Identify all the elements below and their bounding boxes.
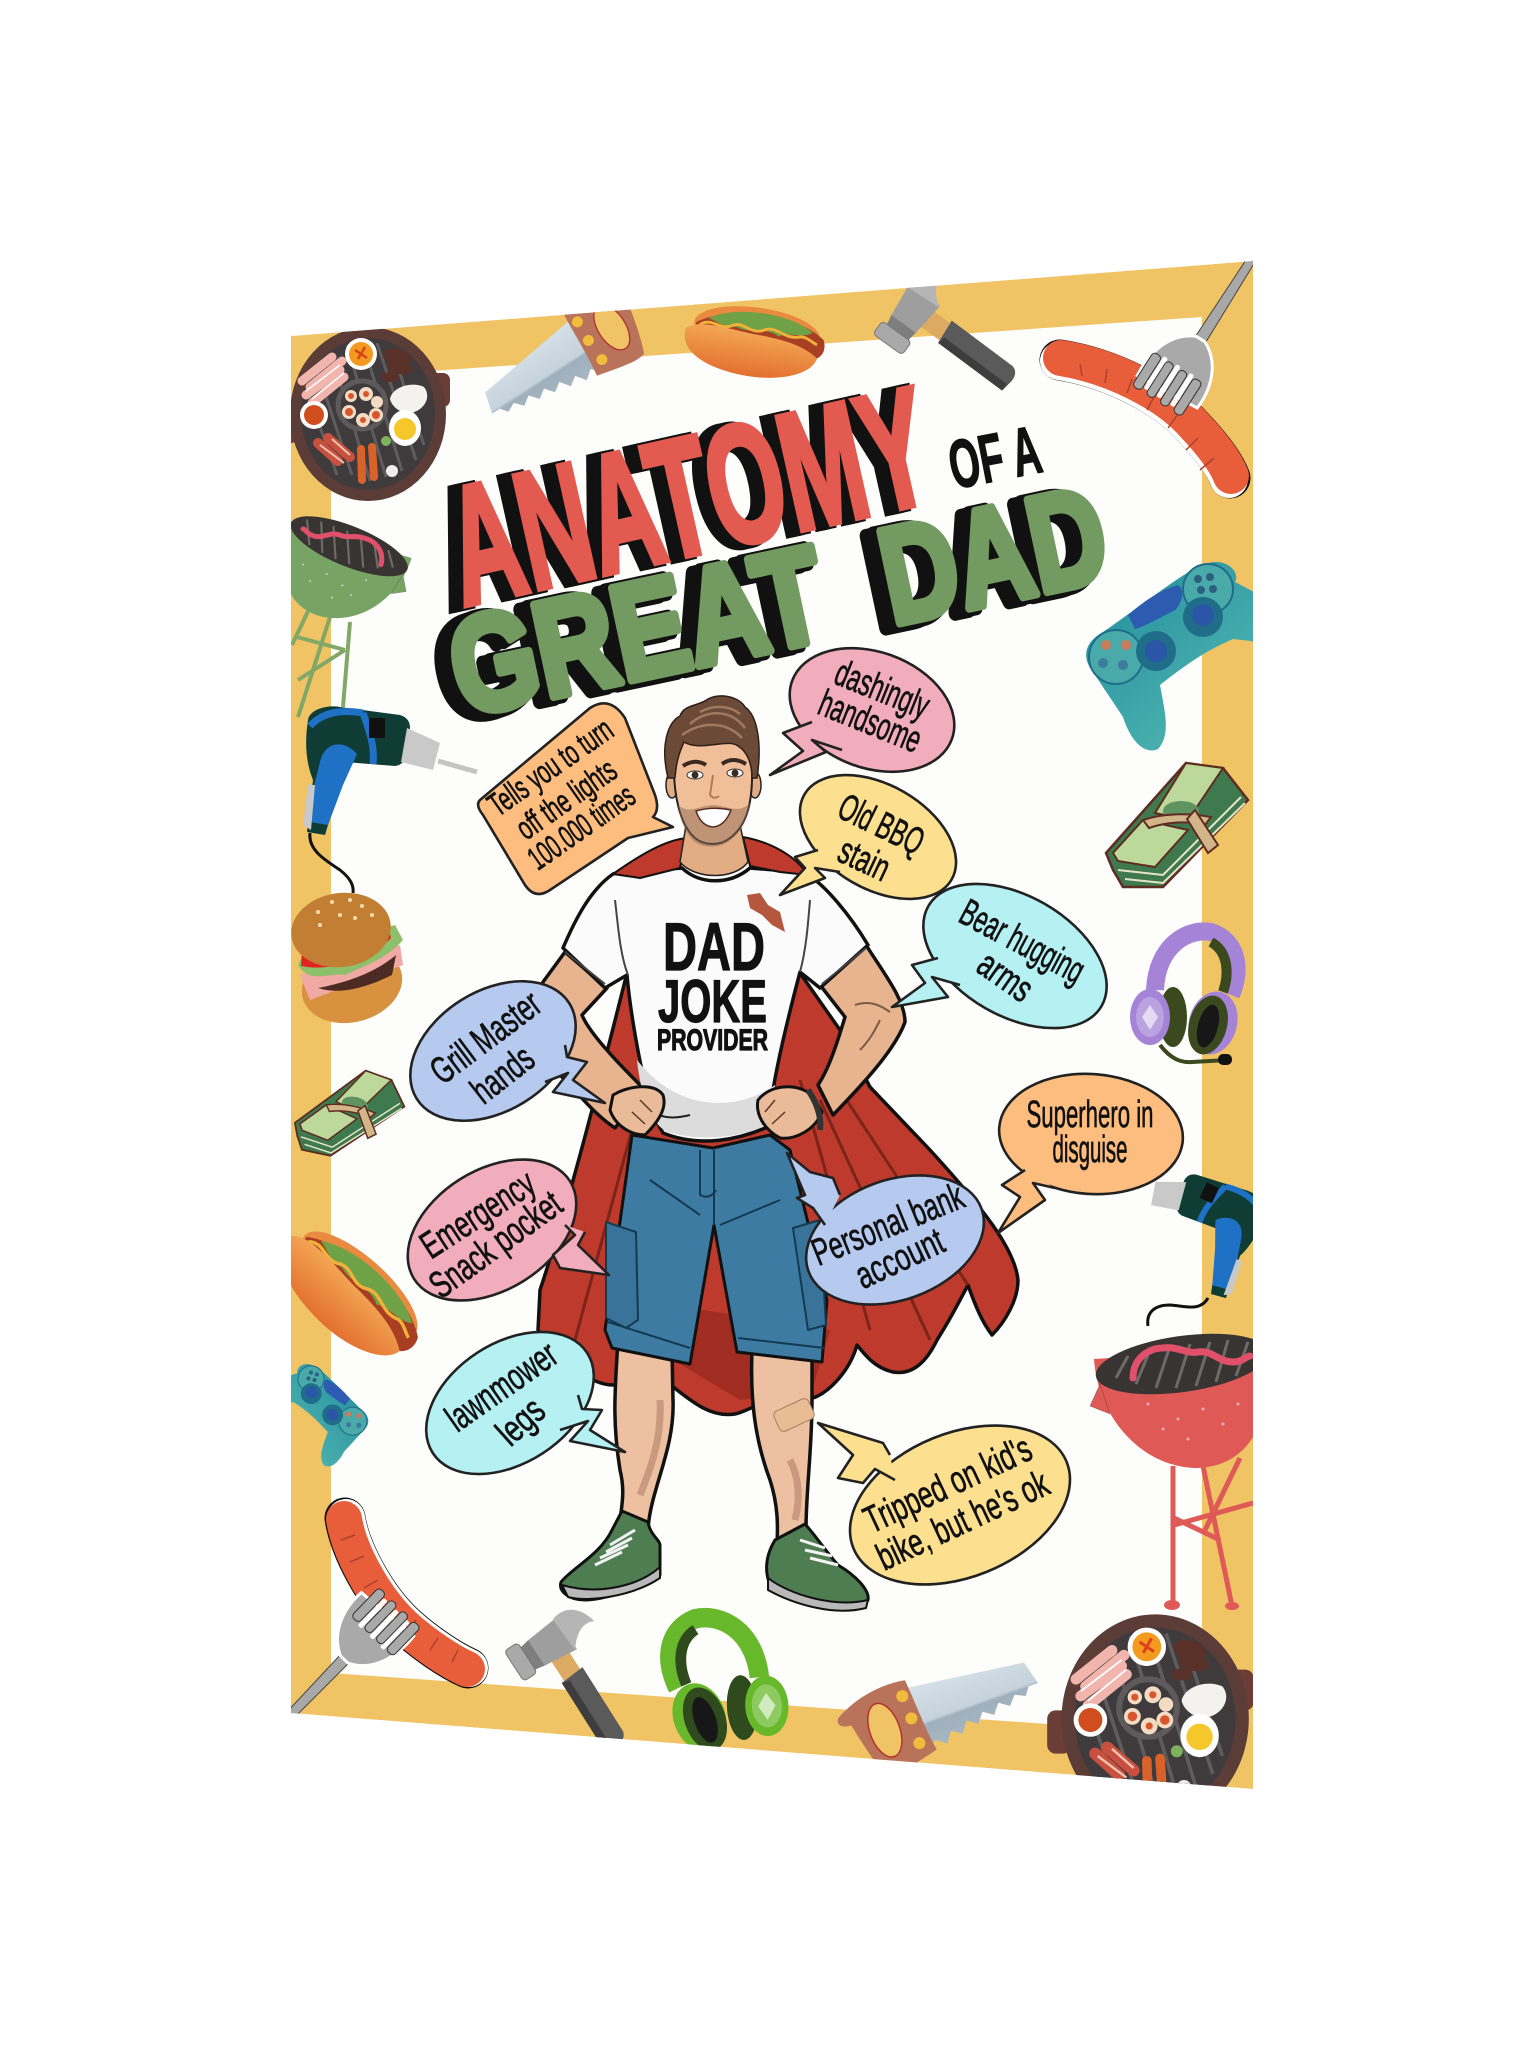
bubble: tripped on kid's bike: bike, but he's ok [870,1463,1056,1579]
bubble: superhero in disguise: Superhero in [1026,1094,1154,1136]
bubble: lawnmower legs: lawnmower [438,1334,566,1440]
head [665,696,761,847]
shirt text: dad joke provider: PROVIDER [657,1024,768,1057]
bubble: grill master hands: Grill Master [423,983,550,1093]
bubble: lawnmower legs [400,1303,625,1503]
bubble: dashingly handsome [770,626,972,794]
bubble: emergency snack pocket: Snack pocket [422,1183,570,1307]
icon: sausage on fork top [1040,261,1253,498]
icon: grill plate top left [278,327,450,501]
icon: sausage on fork bottom [291,1498,488,1714]
bubble: superhero in disguise [995,1068,1187,1233]
hands [610,1087,822,1138]
right shoe [767,1524,868,1611]
bubble: tells you to turn off the lights: Tells you to turn [481,710,620,823]
yellow frame [291,261,1253,1789]
icon: game controller left [291,1364,368,1466]
icon: hammer top [874,286,1016,391]
icon: saw bottom [838,1662,1038,1762]
shirt text: dad joke provider: JOKE [658,968,767,1035]
bubble: old bbq stain [778,749,978,925]
icon: kettle grill red [1090,1334,1253,1610]
title: anatomy [448,382,916,614]
bubble: bear hugging arms [892,854,1132,1058]
cape collar [613,837,808,878]
icon: cash right [1106,763,1248,887]
icon: burger [291,892,403,1024]
bubble: bear hugging arms: arms [969,943,1041,1011]
bubble: old bbq stain: Old BBQ [831,786,931,864]
title: anatomy: ANATOMY [423,353,940,643]
arms [533,945,905,1128]
icon: hot dog left [291,1232,418,1356]
shorts [605,1135,827,1364]
title: great dad: DAD [860,460,1113,655]
title: great dad: DAD [853,462,1105,658]
bubble: tells you to turn off the lights: off the lights [509,751,623,847]
bubble: grill master hands [385,952,605,1150]
bubble: bear hugging arms: Bear hugging [953,892,1091,992]
title: great dad: GREAT [436,517,838,744]
title: great dad: GREAT [430,520,831,747]
bubble: personal bank account: account [849,1220,951,1298]
icon: cash left [294,1070,406,1157]
bubble: grill master hands: hands [463,1038,543,1112]
icon: grill plate bottom right [1047,1614,1253,1787]
legs [615,1340,812,1545]
icon: hammer bottom [505,1610,624,1740]
icon: drill left [303,706,477,893]
shirt text: dad joke provider [657,909,768,1057]
bubble: tells you to turn off the lights [478,703,673,894]
dad figure [533,696,1018,1611]
poster [291,261,1253,1789]
white poster panel [331,317,1202,1735]
bubble: dashingly handsome: handsome [813,682,927,762]
bubble: old bbq stain: stain [832,830,896,890]
bubble: lawnmower legs: legs [488,1390,554,1454]
icon: hot dog top [684,306,824,378]
title: anatomy: ANATOMY [430,351,947,641]
icon: green headset [659,1612,792,1759]
title: anatomy: ANATOMY [416,354,933,644]
bubble: dashingly handsome: dashingly [829,652,935,728]
bandage [772,1397,816,1433]
bubble: emergency snack pocket [382,1130,609,1330]
title: great dad: DAD [867,457,1119,653]
icon: purple headset [1130,931,1244,1065]
title: great dad [434,488,1105,722]
icon: drill right [1146,1174,1253,1326]
icon: game controller right [1086,562,1253,750]
left shoe [561,1511,660,1600]
bubble: tripped on kid's bike [818,1395,1094,1615]
shirt text: dad joke provider: DAD [663,909,765,985]
t-shirt [563,868,868,1141]
bubble: personal bank account [787,1152,1002,1328]
title: of a: OF A [942,412,1047,504]
neck [680,825,748,876]
bacon stain [747,893,785,932]
title: great dad: GREAT [422,522,824,749]
icon: saw top [485,310,644,414]
bubble: personal bank account: Personal bank [806,1175,971,1274]
bubble: superhero in disguise: disguise [1052,1129,1128,1171]
cape [538,973,1018,1415]
bubble: tells you to turn off the lights: 100.000 times [521,777,642,877]
icon: kettle grill green [291,516,412,718]
bubble: tripped on kid's bike: Tripped on kid's [858,1428,1038,1542]
bubble: emergency snack pocket: Emergency [413,1163,543,1267]
